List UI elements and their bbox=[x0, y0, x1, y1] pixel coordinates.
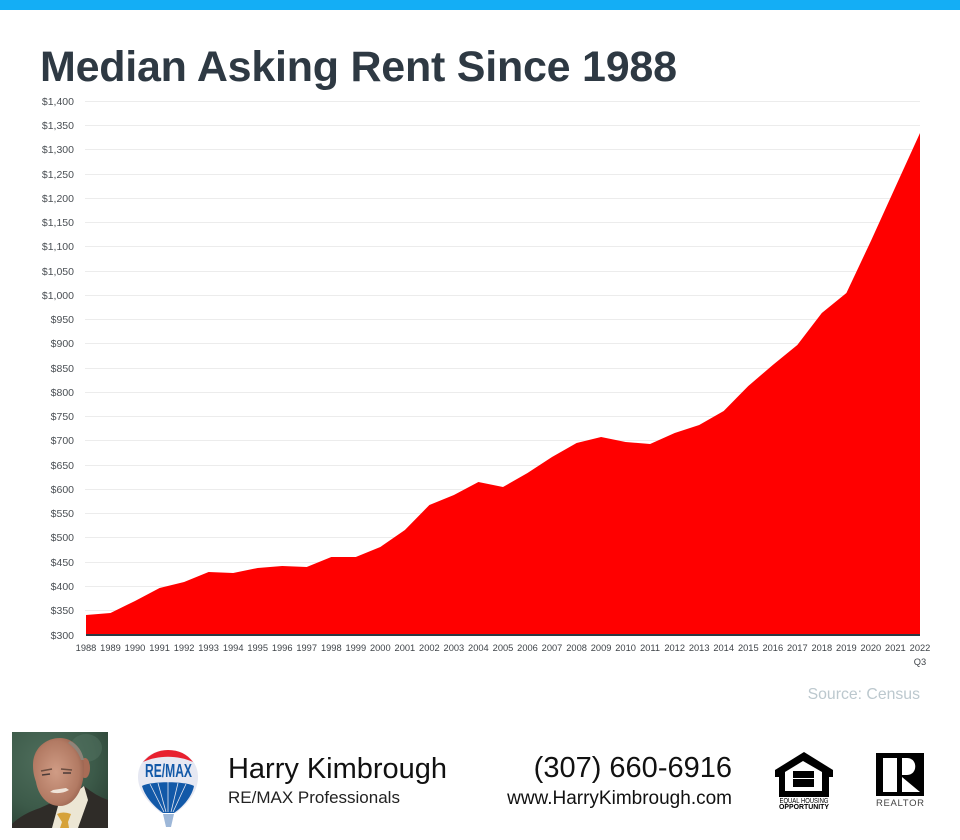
x axis labels: 1989 bbox=[100, 643, 121, 653]
top accent bar bbox=[0, 0, 960, 10]
x axis labels: 2014 bbox=[713, 643, 734, 653]
x axis labels: 2013 bbox=[689, 643, 710, 653]
title: Median Asking Rent Since 1988 bbox=[40, 43, 677, 91]
y axis labels: $1,050 bbox=[42, 266, 74, 278]
x axis labels: 1991 bbox=[149, 643, 170, 653]
y axis labels: $1,350 bbox=[42, 120, 74, 132]
x axis labels: 2008 bbox=[566, 643, 587, 653]
equal housing opportunity logo bbox=[775, 752, 833, 811]
x axis labels: 2003 bbox=[444, 643, 464, 653]
y axis labels: $900 bbox=[51, 338, 74, 350]
y axis labels: $950 bbox=[51, 314, 74, 326]
x axis line bbox=[86, 634, 920, 636]
realtor logo: REALTOR bbox=[876, 798, 924, 809]
blue lower envelope bbox=[142, 782, 194, 813]
shirt bbox=[52, 786, 88, 828]
x axis labels: 2005 bbox=[493, 643, 513, 653]
y axis labels: $1,400 bbox=[42, 96, 74, 108]
x axis labels: 2015 bbox=[738, 643, 759, 653]
x axis labels: 2000 bbox=[370, 643, 391, 653]
x axis labels: 2012 bbox=[664, 643, 685, 653]
website: www.HarryKimbrough.com bbox=[506, 788, 732, 809]
y axis labels: $300 bbox=[51, 630, 74, 642]
source note: Source: Census bbox=[808, 686, 920, 703]
agent name: Harry Kimbrough bbox=[228, 753, 447, 785]
y axis labels: $500 bbox=[51, 532, 74, 544]
y axis labels: $1,250 bbox=[42, 169, 74, 181]
x axis labels: 2020 bbox=[861, 643, 881, 653]
equal housing opportunity logo: OPPORTUNITY bbox=[779, 804, 829, 811]
x axis labels: 1997 bbox=[296, 643, 317, 653]
x axis labels: 1995 bbox=[247, 643, 268, 653]
x axis labels: 2001 bbox=[395, 643, 415, 653]
x axis labels: 2018 bbox=[811, 643, 832, 653]
x axis labels: 2022 bbox=[910, 643, 930, 653]
y axis labels bbox=[42, 96, 74, 642]
x axis labels: 2010 bbox=[615, 643, 636, 653]
x axis labels: 2004 bbox=[468, 643, 489, 653]
y axis labels: $1,100 bbox=[42, 241, 74, 253]
x axis labels: 2019 bbox=[836, 643, 857, 653]
x axis labels: 1999 bbox=[345, 643, 366, 653]
equal housing opportunity logo: EQUAL HOUSING bbox=[780, 798, 828, 805]
y axis labels: $700 bbox=[51, 435, 74, 447]
head bbox=[33, 738, 84, 806]
x axis labels: 1988 bbox=[76, 643, 96, 653]
y axis labels: $550 bbox=[51, 508, 74, 520]
x axis labels: 1996 bbox=[272, 643, 293, 653]
y axis labels: $350 bbox=[51, 605, 74, 617]
y axis labels: $800 bbox=[51, 387, 74, 399]
x axis labels: 2009 bbox=[591, 643, 611, 653]
x axis labels: 1998 bbox=[321, 643, 342, 653]
y axis labels: $1,200 bbox=[42, 193, 74, 205]
agent portrait photo bbox=[12, 732, 108, 828]
x axis labels: Q3 bbox=[914, 657, 926, 667]
x axis labels: 2017 bbox=[787, 643, 808, 653]
smile bbox=[50, 788, 69, 793]
x axis labels: 2011 bbox=[640, 643, 660, 653]
x axis labels: 1990 bbox=[125, 643, 145, 653]
tie bbox=[57, 812, 71, 828]
wordmark: RE/MAX bbox=[145, 761, 192, 781]
x axis labels: 1992 bbox=[174, 643, 194, 653]
x axis labels: 2021 bbox=[885, 643, 906, 653]
y axis labels: $400 bbox=[51, 581, 74, 593]
y axis labels: $1,300 bbox=[42, 144, 74, 156]
brows and eyes bbox=[41, 769, 72, 771]
y axis labels: $650 bbox=[51, 460, 74, 472]
jacket bbox=[12, 786, 108, 828]
phone number: (307) 660-6916 bbox=[534, 752, 732, 784]
y axis labels: $450 bbox=[51, 557, 74, 569]
x axis labels: 2002 bbox=[419, 643, 440, 653]
y axis labels: $1,150 bbox=[42, 217, 74, 229]
y axis labels: $850 bbox=[51, 363, 74, 375]
ear bbox=[83, 758, 90, 778]
x axis labels bbox=[76, 643, 930, 667]
x axis labels: 1994 bbox=[223, 643, 244, 653]
side hair bbox=[68, 741, 84, 760]
x axis labels: 2006 bbox=[517, 643, 538, 653]
balloon envelope bbox=[138, 750, 198, 813]
x axis labels: 2007 bbox=[542, 643, 562, 653]
realtor logo bbox=[876, 753, 924, 809]
area chart: median asking rent bbox=[42, 96, 930, 667]
y axis labels: $600 bbox=[51, 484, 74, 496]
x axis labels: 1993 bbox=[198, 643, 219, 653]
brokerage: RE/MAX Professionals bbox=[228, 788, 400, 807]
basket bbox=[163, 814, 174, 827]
y axis labels: $750 bbox=[51, 411, 74, 423]
red band bbox=[143, 750, 193, 762]
x axis labels: 2016 bbox=[762, 643, 783, 653]
RE/MAX balloon logo bbox=[138, 750, 198, 827]
y axis labels: $1,000 bbox=[42, 290, 74, 302]
red area series bbox=[86, 133, 920, 635]
